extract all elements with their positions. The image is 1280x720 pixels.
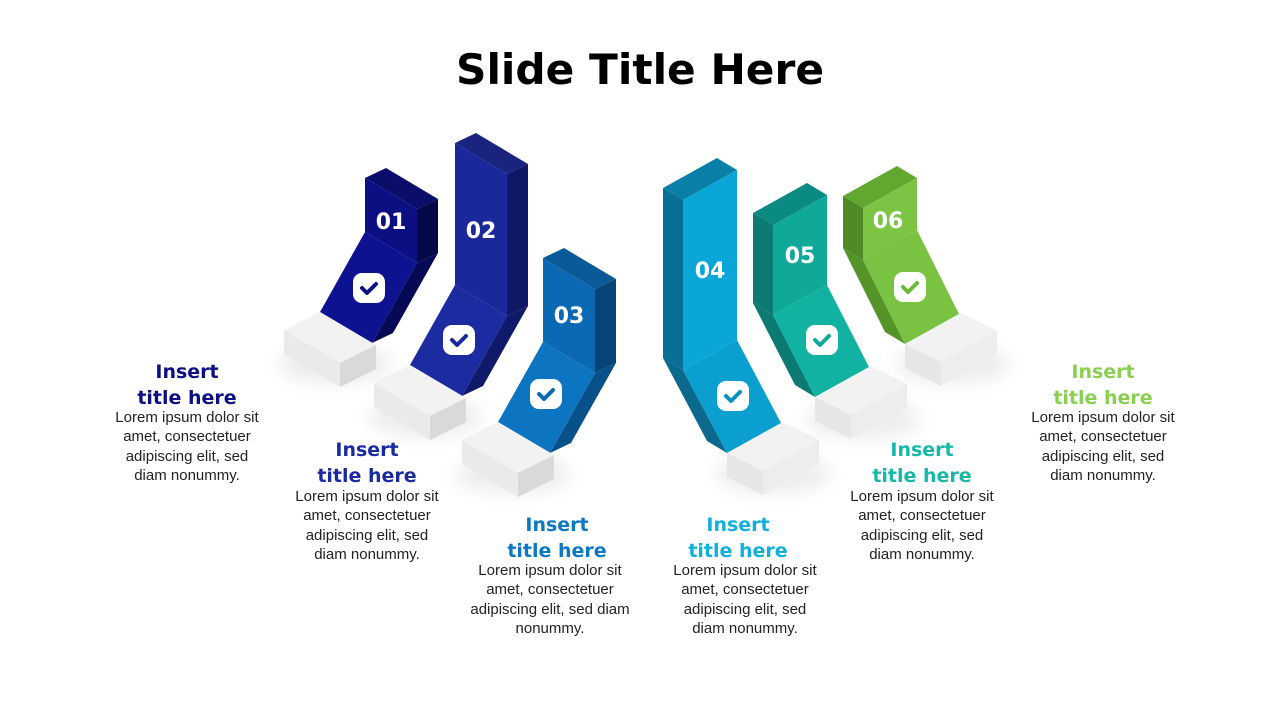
shape 01 <box>277 168 438 387</box>
text block 03: title here <box>507 540 607 562</box>
text block 01: title here <box>137 387 237 409</box>
text block 06: amet, consectetuer <box>1039 428 1167 445</box>
text block 03: adipiscing elit, sed diam <box>470 601 630 618</box>
text block 04 <box>673 514 818 637</box>
text block 04: amet, consectetuer <box>681 581 809 598</box>
text block 02 <box>295 439 440 563</box>
text block 02: Insert <box>335 439 399 461</box>
icon: check 03 <box>530 379 562 409</box>
text block 01 <box>115 361 260 484</box>
text block 01: Lorem ipsum dolor sit <box>115 409 260 426</box>
text block 05: Insert <box>890 439 954 461</box>
text block 01: Insert <box>155 361 219 383</box>
icon: check 06 <box>894 272 926 302</box>
text block 04: adipiscing elit, sed <box>684 601 806 618</box>
number 01: 01 <box>376 210 406 235</box>
text block 03: Lorem ipsum dolor sit <box>478 562 623 579</box>
text block 04: Insert <box>706 514 770 536</box>
text block 06: adipiscing elit, sed <box>1042 448 1164 465</box>
icon: check 02 <box>443 325 475 355</box>
text block 05: diam nonummy. <box>869 546 975 563</box>
shape 05 <box>753 183 921 439</box>
text block 03: amet, consectetuer <box>486 581 614 598</box>
icon: check 01 <box>353 273 385 303</box>
text block 03 <box>470 514 630 637</box>
text block 06: Lorem ipsum dolor sit <box>1031 409 1176 426</box>
text block 06: title here <box>1053 387 1153 409</box>
shape 03 <box>455 248 616 497</box>
text block 02: title here <box>317 465 417 487</box>
title: Slide Title Here <box>456 45 824 94</box>
text block 01: amet, consectetuer <box>123 428 251 445</box>
text block 06: Insert <box>1071 361 1135 383</box>
shape 04 <box>663 158 831 495</box>
number 02: 02 <box>466 219 496 244</box>
icon: check 04 <box>717 381 749 411</box>
number 03: 03 <box>554 304 584 329</box>
text block 05 <box>850 439 995 563</box>
number 04: 04 <box>695 259 725 284</box>
text block 01: adipiscing elit, sed <box>126 448 248 465</box>
text block 02: Lorem ipsum dolor sit <box>295 488 440 505</box>
text block 04: diam nonummy. <box>692 620 798 637</box>
text block 06: diam nonummy. <box>1050 467 1156 484</box>
number 05: 05 <box>785 244 815 269</box>
text block 04: Lorem ipsum dolor sit <box>673 562 818 579</box>
text block 02: diam nonummy. <box>314 546 420 563</box>
text block 05: adipiscing elit, sed <box>861 527 983 544</box>
text block 04: title here <box>688 540 788 562</box>
text block 01: diam nonummy. <box>134 467 240 484</box>
text block 03: Insert <box>525 514 589 536</box>
text block 05: title here <box>872 465 972 487</box>
text block 02: adipiscing elit, sed <box>306 527 428 544</box>
text block 02: amet, consectetuer <box>303 507 431 524</box>
shape 06 <box>843 166 1011 386</box>
text block 06 <box>1031 361 1176 484</box>
text block 03: nonummy. <box>516 620 584 637</box>
shape 02 <box>367 133 528 440</box>
icon: check 05 <box>806 325 838 355</box>
number 06: 06 <box>873 209 903 234</box>
text block 05: amet, consectetuer <box>858 507 986 524</box>
text block 05: Lorem ipsum dolor sit <box>850 488 995 505</box>
